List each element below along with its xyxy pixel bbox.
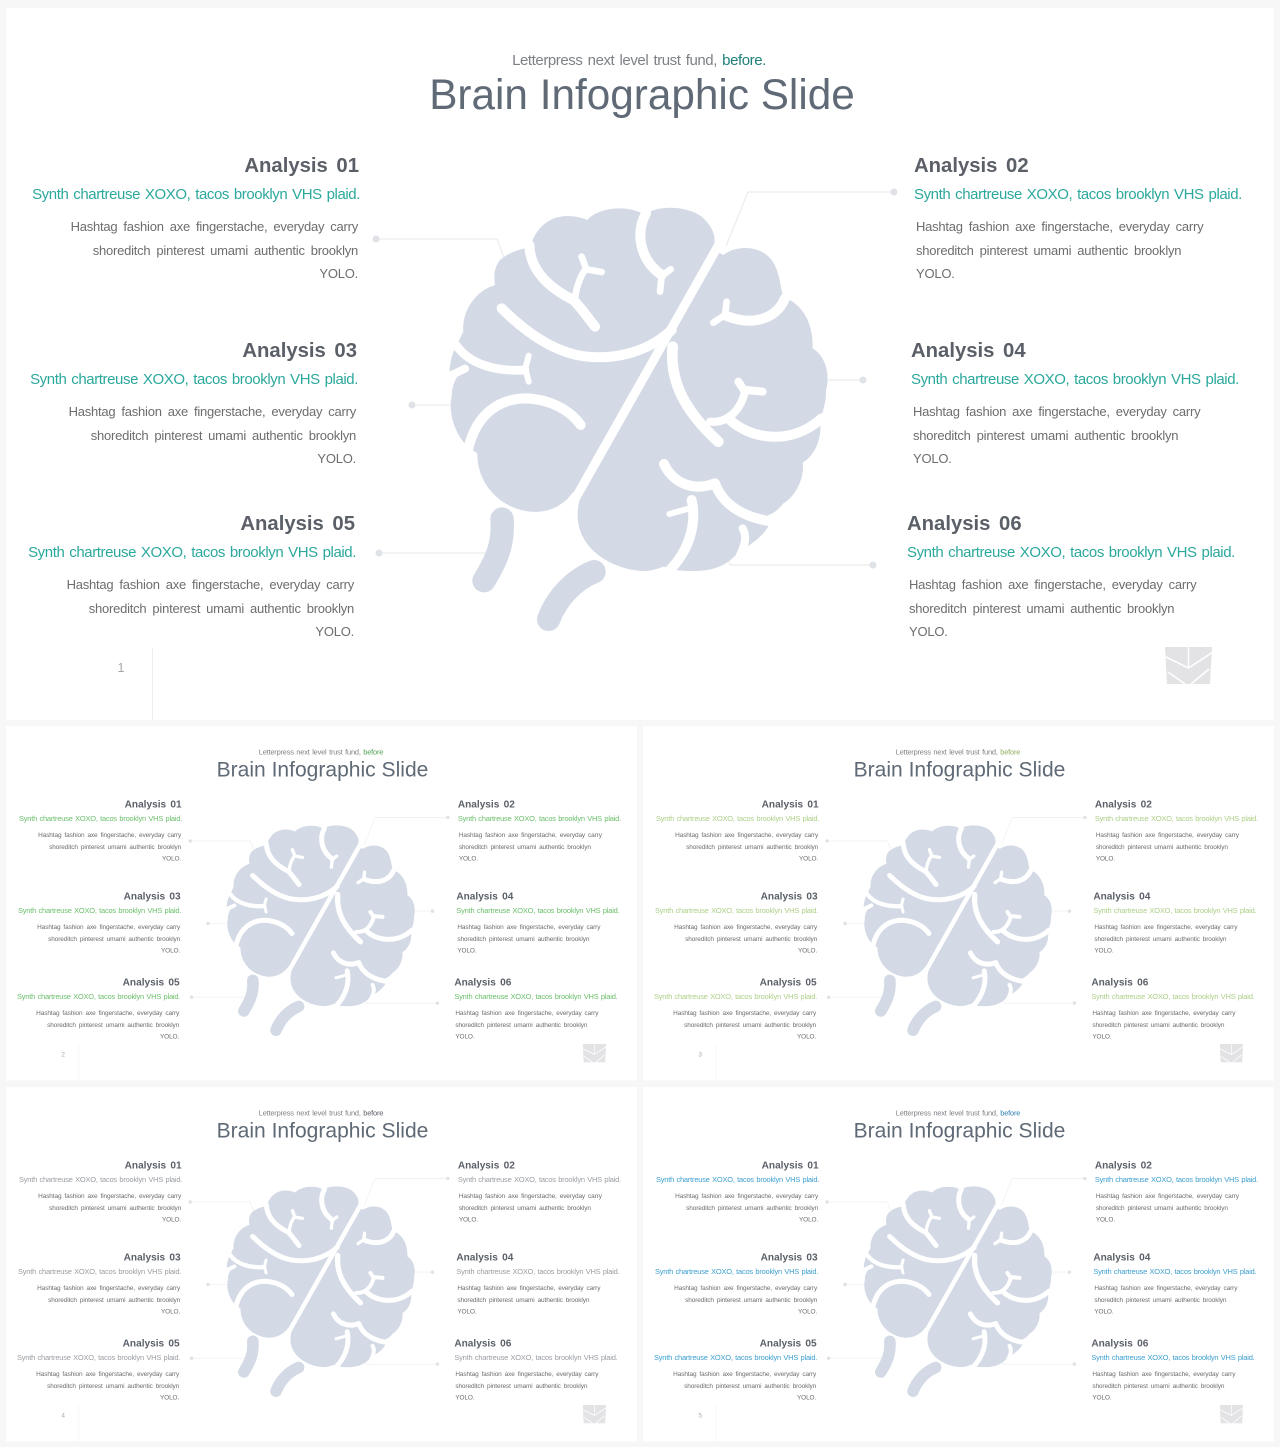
- icon: logo: [583, 1405, 606, 1424]
- text block: analysis 06: YOLO.: [1092, 1394, 1112, 1401]
- text block: analysis 01: YOLO.: [799, 854, 818, 862]
- text block: analysis 04: shoreditch pinterest umami authentic brooklyn: [913, 428, 1178, 442]
- text block: analysis 05: YOLO.: [160, 1394, 179, 1401]
- text block: analysis 06: [907, 513, 1235, 639]
- text block: analysis 05: YOLO.: [160, 1033, 179, 1040]
- text block: analysis 06: YOLO.: [909, 624, 948, 639]
- text block: analysis 06: Hashtag fashion axe fingerstache, everyday carry: [909, 577, 1196, 592]
- text block: analysis 01: YOLO.: [799, 1215, 818, 1223]
- text block: analysis 03: Analysis 03: [761, 891, 818, 902]
- text block: analysis 03: Hashtag fashion axe fingerstache, everyday carry: [37, 923, 180, 931]
- text block: analysis 01: Synth chartreuse XOXO, tacos brooklyn VHS plaid.: [19, 815, 182, 823]
- text block: analysis 06: YOLO.: [455, 1033, 475, 1040]
- text block: analysis 02: Synth chartreuse XOXO, tacos brooklyn VHS plaid.: [458, 815, 621, 823]
- text block: analysis 06: Synth chartreuse XOXO, tacos brooklyn VHS plaid.: [454, 993, 618, 1001]
- leader lines: [372, 188, 898, 568]
- text block: analysis 02: Hashtag fashion axe fingerstache, everyday carry: [916, 219, 1203, 234]
- text block: analysis 04: YOLO.: [457, 946, 477, 954]
- text block: analysis 02: Analysis 02: [1095, 799, 1152, 810]
- text block: analysis 05: [647, 1336, 817, 1403]
- text block: analysis 02: Synth chartreuse XOXO, tacos brooklyn VHS plaid.: [458, 1176, 621, 1184]
- text block: analysis 02: shoreditch pinterest umami authentic brooklyn: [1096, 1204, 1228, 1211]
- subtitle: Letterpress next level trust fund, before: [896, 748, 1020, 756]
- text block: analysis 06: YOLO.: [455, 1394, 475, 1401]
- icon: logo: [1220, 1044, 1243, 1062]
- text block: analysis 02: YOLO.: [459, 854, 478, 862]
- text block: analysis 02: [914, 155, 1242, 281]
- text block: analysis 06: Synth chartreuse XOXO, tacos brooklyn VHS plaid.: [907, 544, 1235, 561]
- text block: analysis 04: Synth chartreuse XOXO, tacos brooklyn VHS plaid.: [1093, 1268, 1257, 1276]
- text block: analysis 01: Hashtag fashion axe fingerstache, everyday carry: [38, 1192, 181, 1199]
- text block: analysis 02: Synth chartreuse XOXO, tacos brooklyn VHS plaid.: [1095, 815, 1258, 823]
- text block: analysis 01: Hashtag fashion axe fingerstache, everyday carry: [675, 831, 818, 838]
- text block: analysis 03: Synth chartreuse XOXO, tacos brooklyn VHS plaid.: [30, 371, 358, 388]
- text block: analysis 02: shoreditch pinterest umami authentic brooklyn: [1096, 843, 1228, 850]
- text block: analysis 01: Synth chartreuse XOXO, tacos brooklyn VHS plaid.: [656, 1176, 819, 1184]
- text block: analysis 03: Synth chartreuse XOXO, tacos brooklyn VHS plaid.: [18, 907, 181, 915]
- text block: analysis 03: [18, 891, 181, 954]
- page number: 5: [698, 1411, 702, 1419]
- text block: analysis 02: Analysis 02: [914, 155, 1029, 177]
- text block: analysis 03: [655, 891, 818, 954]
- title: Brain Infographic Slide: [854, 1118, 1065, 1142]
- text block: analysis 06: Analysis 06: [1091, 1338, 1148, 1349]
- icon: brain: [226, 1186, 415, 1397]
- text block: analysis 06: Synth chartreuse XOXO, tacos brooklyn VHS plaid.: [1091, 993, 1255, 1001]
- text block: analysis 04: Hashtag fashion axe fingerstache, everyday carry: [1094, 923, 1237, 931]
- text block: analysis 03: shoreditch pinterest umami authentic brooklyn: [48, 1296, 180, 1303]
- text block: analysis 01: Hashtag fashion axe fingerstache, everyday carry: [71, 219, 358, 234]
- text block: analysis 02: Analysis 02: [1095, 1160, 1152, 1171]
- text block: analysis 05: Synth chartreuse XOXO, tacos brooklyn VHS plaid.: [654, 1354, 817, 1362]
- icon: logo: [1220, 1405, 1243, 1423]
- icon: brain: [854, 1178, 1063, 1401]
- text block: analysis 04: Analysis 04: [456, 891, 513, 902]
- text block: analysis 04: Analysis 04: [456, 1252, 513, 1263]
- text block: analysis 04: Synth chartreuse XOXO, tacos brooklyn VHS plaid.: [911, 371, 1239, 388]
- text block: analysis 06: YOLO.: [1092, 1033, 1112, 1040]
- panel: slide 4 gray: [6, 1087, 637, 1441]
- text block: analysis 01: Synth chartreuse XOXO, tacos brooklyn VHS plaid.: [19, 1176, 182, 1184]
- text block: analysis 04: [911, 340, 1239, 466]
- text block: analysis 03: [648, 1250, 818, 1317]
- text block: analysis 02: shoreditch pinterest umami authentic brooklyn: [459, 843, 591, 850]
- text block: analysis 02: YOLO.: [1096, 1215, 1115, 1223]
- text block: analysis 01: shoreditch pinterest umami authentic brooklyn: [93, 242, 358, 258]
- text block: analysis 01: Analysis 01: [762, 799, 819, 810]
- text block: analysis 03: Synth chartreuse XOXO, tacos brooklyn VHS plaid.: [655, 1268, 818, 1276]
- text block: analysis 04: YOLO.: [1094, 1307, 1114, 1315]
- text block: analysis 05: Hashtag fashion axe fingerstache, everyday carry: [673, 1370, 816, 1378]
- text block: analysis 05: shoreditch pinterest umami authentic brooklyn: [684, 1382, 816, 1389]
- text block: analysis 05: Hashtag fashion axe fingerstache, everyday carry: [673, 1009, 816, 1017]
- text block: analysis 03: [30, 340, 358, 466]
- leader lines: [643, 1087, 1274, 1441]
- text block: analysis 06: shoreditch pinterest umami authentic brooklyn: [455, 1382, 587, 1389]
- text block: analysis 05: Hashtag fashion axe fingerstache, everyday carry: [36, 1009, 179, 1017]
- text block: analysis 03: shoreditch pinterest umami authentic brooklyn: [685, 935, 817, 942]
- text block: analysis 01: Synth chartreuse XOXO, tacos brooklyn VHS plaid.: [656, 815, 819, 823]
- title: Brain Infographic Slide: [217, 1118, 428, 1142]
- text block: analysis 02: Synth chartreuse XOXO, tacos brooklyn VHS plaid.: [914, 186, 1242, 203]
- text block: analysis 03: YOLO.: [798, 1307, 817, 1315]
- text block: analysis 02: Synth chartreuse XOXO, tacos brooklyn VHS plaid.: [1095, 1176, 1258, 1184]
- text block: analysis 06: [1091, 1336, 1261, 1403]
- text block: analysis 06: Hashtag fashion axe fingerstache, everyday carry: [1092, 1009, 1235, 1017]
- text block: analysis 01: YOLO.: [162, 854, 181, 862]
- text block: analysis 05: Synth chartreuse XOXO, tacos brooklyn VHS plaid.: [654, 993, 817, 1001]
- text block: analysis 04: Hashtag fashion axe fingerstache, everyday carry: [1094, 1284, 1237, 1292]
- title: Brain Infographic Slide: [854, 757, 1065, 781]
- text block: analysis 06: Synth chartreuse XOXO, tacos brooklyn VHS plaid.: [1091, 1354, 1255, 1362]
- panel: slide 2 green: [6, 726, 637, 1080]
- text block: analysis 01: Analysis 01: [244, 155, 359, 177]
- text block: analysis 04: Synth chartreuse XOXO, tacos brooklyn VHS plaid.: [456, 1268, 620, 1276]
- text block: analysis 05: Hashtag fashion axe fingerstache, everyday carry: [67, 577, 354, 592]
- page number: 3: [698, 1050, 702, 1058]
- text block: analysis 06: shoreditch pinterest umami authentic brooklyn: [455, 1021, 587, 1028]
- text block: analysis 01: Hashtag fashion axe fingerstache, everyday carry: [675, 1192, 818, 1199]
- subtitle: Letterpress next level trust fund, before: [259, 1109, 383, 1117]
- text block: analysis 06: shoreditch pinterest umami authentic brooklyn: [1092, 1021, 1224, 1028]
- text block: analysis 03: Hashtag fashion axe fingerstache, everyday carry: [674, 1284, 817, 1292]
- text block: analysis 03: Analysis 03: [124, 1252, 181, 1263]
- text block: analysis 01: Analysis 01: [125, 799, 182, 810]
- text block: analysis 01: [19, 799, 182, 862]
- subtitle: Letterpress next level trust fund, before: [896, 1109, 1020, 1117]
- text block: analysis 02: Hashtag fashion axe fingerstache, everyday carry: [1096, 831, 1239, 838]
- text block: analysis 03: Synth chartreuse XOXO, tacos brooklyn VHS plaid.: [18, 1268, 181, 1276]
- text block: analysis 03: shoreditch pinterest umami authentic brooklyn: [91, 428, 356, 442]
- text block: analysis 05: Hashtag fashion axe fingerstache, everyday carry: [36, 1370, 179, 1378]
- text block: analysis 05: [28, 513, 356, 639]
- subtitle: Letterpress next level trust fund, before: [259, 748, 383, 756]
- leader lines: [188, 816, 450, 1005]
- text block: analysis 02: Hashtag fashion axe fingerstache, everyday carry: [459, 831, 602, 838]
- text block: analysis 04: YOLO.: [457, 1307, 477, 1315]
- text block: analysis 02: [458, 799, 621, 862]
- text block: analysis 02: shoreditch pinterest umami authentic brooklyn: [916, 242, 1181, 258]
- subtitle: Letterpress next level trust fund, before.: [512, 52, 766, 69]
- text block: analysis 01: YOLO.: [319, 266, 358, 281]
- text block: analysis 03: YOLO.: [161, 1307, 180, 1315]
- text block: analysis 06: shoreditch pinterest umami authentic brooklyn: [1092, 1382, 1224, 1389]
- text block: analysis 06: Analysis 06: [1091, 977, 1148, 988]
- text block: analysis 04: [456, 891, 620, 954]
- text block: analysis 04: Analysis 04: [1093, 1252, 1150, 1263]
- text block: analysis 05: shoreditch pinterest umami authentic brooklyn: [89, 600, 354, 616]
- page number: 1: [117, 660, 125, 675]
- text block: analysis 01: Analysis 01: [125, 1160, 182, 1171]
- text block: analysis 02: YOLO.: [916, 266, 955, 281]
- panel: slide 3 light green: [643, 726, 1274, 1080]
- text block: analysis 02: Analysis 02: [458, 1160, 515, 1171]
- text block: analysis 06: Analysis 06: [907, 513, 1022, 535]
- text block: analysis 05: shoreditch pinterest umami authentic brooklyn: [47, 1021, 179, 1028]
- leader lines: [826, 816, 1086, 1005]
- text block: analysis 06: Analysis 06: [454, 1338, 511, 1349]
- icon: brain: [226, 825, 415, 1036]
- text block: analysis 04: YOLO.: [913, 451, 952, 466]
- icon: brain: [450, 208, 828, 631]
- page number: 4: [61, 1411, 65, 1419]
- text block: analysis 01: [19, 1160, 182, 1223]
- text block: analysis 03: Analysis 03: [242, 340, 357, 362]
- icon: logo: [1165, 647, 1212, 684]
- text block: analysis 02: Analysis 02: [458, 799, 515, 810]
- text block: analysis 04: shoreditch pinterest umami authentic brooklyn: [457, 935, 589, 942]
- text block: analysis 01: [32, 155, 360, 281]
- text block: analysis 03: Analysis 03: [124, 891, 181, 902]
- text block: analysis 05: shoreditch pinterest umami authentic brooklyn: [47, 1382, 179, 1389]
- text block: analysis 04: shoreditch pinterest umami authentic brooklyn: [1094, 935, 1226, 942]
- text block: analysis 05: Synth chartreuse XOXO, tacos brooklyn VHS plaid.: [17, 1354, 180, 1362]
- text block: analysis 06: Hashtag fashion axe fingerstache, everyday carry: [455, 1370, 598, 1378]
- text block: analysis 04: [456, 1252, 620, 1315]
- text block: analysis 04: shoreditch pinterest umami authentic brooklyn: [457, 1296, 589, 1303]
- title: Brain Infographic Slide: [429, 71, 855, 118]
- title: Brain Infographic Slide: [217, 757, 428, 781]
- text block: analysis 06: Analysis 06: [454, 977, 511, 988]
- text block: analysis 02: YOLO.: [1096, 854, 1115, 862]
- text block: analysis 03: Analysis 03: [761, 1252, 818, 1263]
- text block: analysis 05: Analysis 05: [123, 1338, 180, 1349]
- text block: analysis 02: YOLO.: [459, 1215, 478, 1223]
- text block: analysis 06: shoreditch pinterest umami authentic brooklyn: [909, 600, 1174, 616]
- text block: analysis 02: Hashtag fashion axe fingerstache, everyday carry: [1096, 1192, 1239, 1199]
- text block: analysis 03: [18, 1252, 181, 1315]
- text block: analysis 01: shoreditch pinterest umami authentic brooklyn: [686, 1204, 818, 1211]
- text block: analysis 04: [1093, 1250, 1263, 1317]
- text block: analysis 04: Hashtag fashion axe fingerstache, everyday carry: [457, 1284, 600, 1292]
- text block: analysis 01: shoreditch pinterest umami authentic brooklyn: [686, 843, 818, 850]
- text block: analysis 05: Analysis 05: [760, 1338, 817, 1349]
- text block: analysis 06: [454, 1338, 618, 1401]
- text block: analysis 01: shoreditch pinterest umami authentic brooklyn: [49, 843, 181, 850]
- text block: analysis 06: Hashtag fashion axe fingerstache, everyday carry: [455, 1009, 598, 1017]
- text block: analysis 04: Hashtag fashion axe fingerstache, everyday carry: [457, 923, 600, 931]
- text block: analysis 01: [656, 799, 819, 862]
- text block: analysis 05: Analysis 05: [760, 977, 817, 988]
- text block: analysis 05: YOLO.: [315, 624, 354, 639]
- text block: analysis 05: Analysis 05: [123, 977, 180, 988]
- text block: analysis 01: Analysis 01: [762, 1160, 819, 1171]
- text block: analysis 03: Hashtag fashion axe fingerstache, everyday carry: [674, 923, 817, 931]
- icon: logo: [583, 1044, 606, 1062]
- text block: analysis 04: Synth chartreuse XOXO, tacos brooklyn VHS plaid.: [1093, 907, 1257, 915]
- text block: analysis 06: [1091, 977, 1255, 1040]
- text block: analysis 03: YOLO.: [798, 946, 817, 954]
- text block: analysis 02: [458, 1160, 621, 1223]
- text block: analysis 03: Hashtag fashion axe fingerstache, everyday carry: [37, 1284, 180, 1292]
- text block: analysis 04: [1093, 891, 1257, 954]
- text block: analysis 05: shoreditch pinterest umami authentic brooklyn: [684, 1021, 816, 1028]
- page number: 2: [61, 1050, 65, 1058]
- text block: analysis 04: Synth chartreuse XOXO, tacos brooklyn VHS plaid.: [456, 907, 620, 915]
- text block: analysis 04: Analysis 04: [1093, 891, 1150, 902]
- text block: analysis 04: shoreditch pinterest umami authentic brooklyn: [1094, 1296, 1226, 1303]
- text block: analysis 02: [1095, 799, 1258, 862]
- text block: analysis 06: [454, 977, 618, 1040]
- text block: analysis 03: YOLO.: [317, 451, 356, 466]
- text block: analysis 03: shoreditch pinterest umami authentic brooklyn: [685, 1296, 817, 1303]
- text block: analysis 05: [17, 977, 180, 1040]
- text block: analysis 05: YOLO.: [797, 1033, 816, 1040]
- text block: analysis 02: Hashtag fashion axe fingerstache, everyday carry: [459, 1192, 602, 1199]
- text block: analysis 02: [1095, 1158, 1264, 1225]
- text block: analysis 02: shoreditch pinterest umami authentic brooklyn: [459, 1204, 591, 1211]
- panel: slide 1 main: [6, 8, 1274, 720]
- panel: slide 5 blue: [643, 1087, 1274, 1441]
- text block: analysis 03: Synth chartreuse XOXO, tacos brooklyn VHS plaid.: [655, 907, 818, 915]
- leader lines: [188, 1177, 450, 1366]
- text block: analysis 04: Analysis 04: [911, 340, 1026, 362]
- text block: analysis 06: Hashtag fashion axe fingerstache, everyday carry: [1092, 1370, 1235, 1378]
- text block: analysis 03: shoreditch pinterest umami authentic brooklyn: [48, 935, 180, 942]
- text block: analysis 03: YOLO.: [161, 946, 180, 954]
- icon: brain: [864, 825, 1052, 1036]
- text block: analysis 01: shoreditch pinterest umami authentic brooklyn: [49, 1204, 181, 1211]
- text block: analysis 01: [649, 1158, 819, 1225]
- text block: analysis 06: Synth chartreuse XOXO, tacos brooklyn VHS plaid.: [454, 1354, 618, 1362]
- text block: analysis 01: Hashtag fashion axe fingerstache, everyday carry: [38, 831, 181, 838]
- text block: analysis 05: YOLO.: [797, 1394, 816, 1401]
- text block: analysis 04: YOLO.: [1094, 946, 1114, 954]
- text block: analysis 05: Synth chartreuse XOXO, tacos brooklyn VHS plaid.: [28, 544, 356, 561]
- text block: analysis 03: Hashtag fashion axe fingerstache, everyday carry: [69, 404, 356, 419]
- text block: analysis 01: Synth chartreuse XOXO, tacos brooklyn VHS plaid.: [32, 186, 360, 203]
- text block: analysis 05: Analysis 05: [240, 513, 355, 535]
- text block: analysis 05: Synth chartreuse XOXO, tacos brooklyn VHS plaid.: [17, 993, 180, 1001]
- text block: analysis 04: Hashtag fashion axe fingerstache, everyday carry: [913, 404, 1200, 419]
- text block: analysis 05: [654, 977, 817, 1040]
- text block: analysis 01: YOLO.: [162, 1215, 181, 1223]
- text block: analysis 05: [17, 1338, 180, 1401]
